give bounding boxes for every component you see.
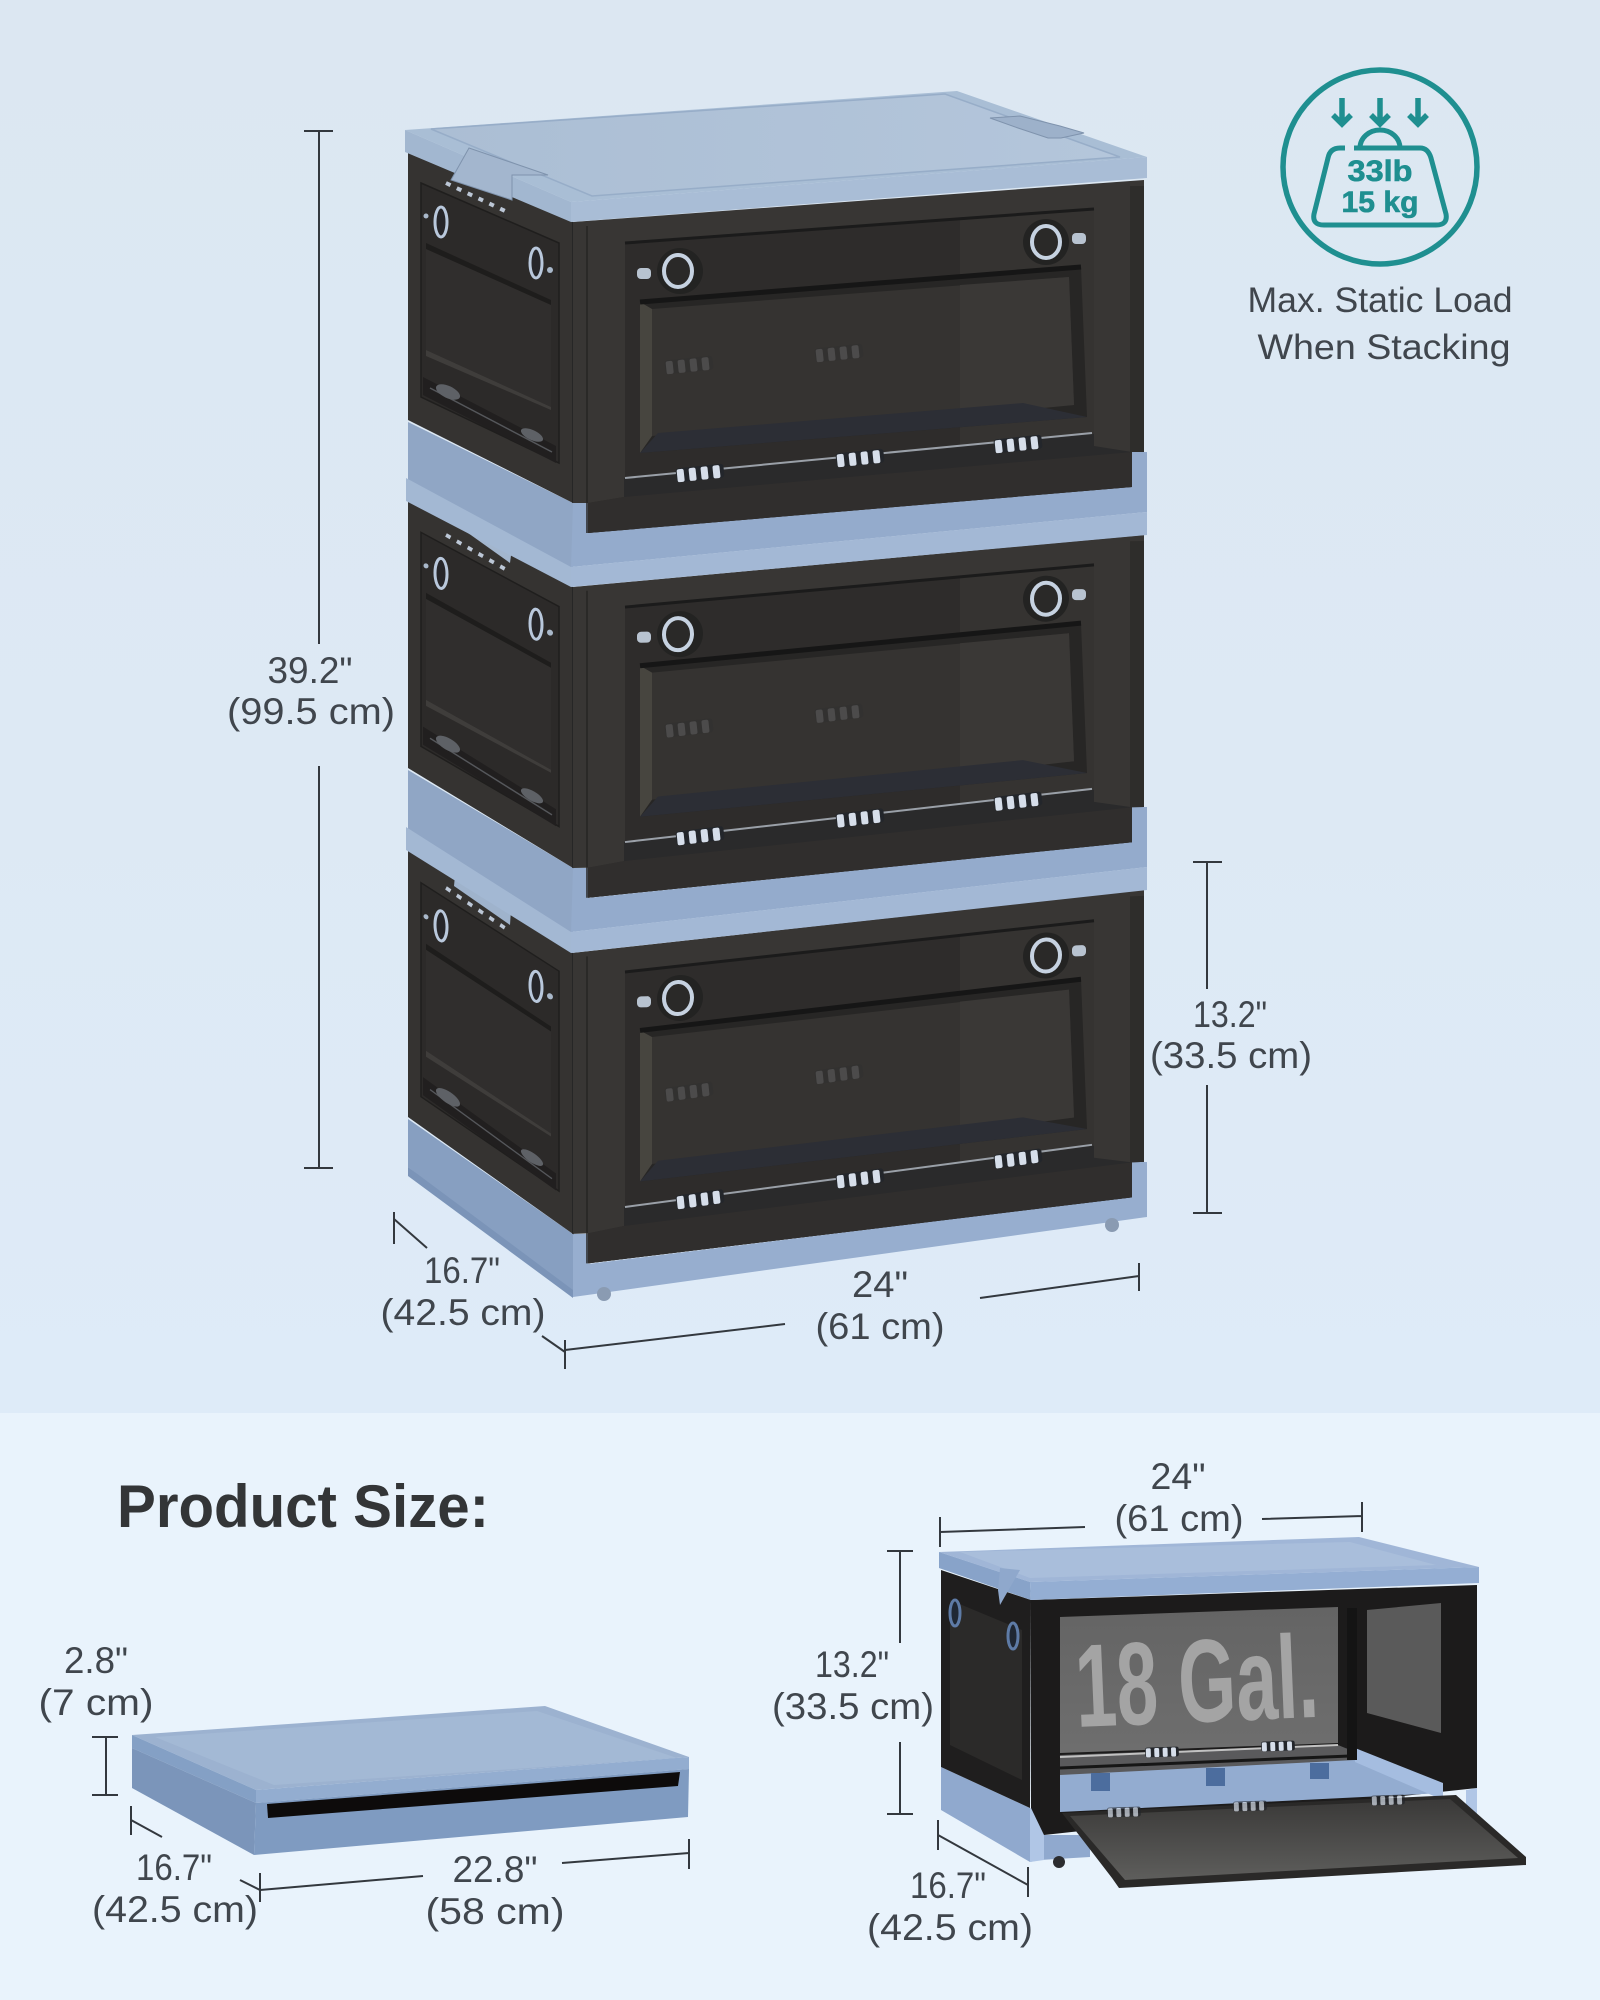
- background: lower section: [0, 1413, 1600, 2000]
- dimension: folded width 22.8 in: 22.8": [452, 1849, 538, 1890]
- folded box: [132, 1706, 689, 1855]
- dimension: depth 16.7 in: [380, 1212, 565, 1369]
- dimension: folded width 22.8 in: (58 cm): [426, 1891, 564, 1932]
- open front door: [1062, 1795, 1526, 1888]
- icon: max static load weight badge: 15 kg: [1342, 186, 1418, 219]
- stacked storage boxes: [405, 91, 1147, 1301]
- dimension: box height 13.2 in: (33.5 cm): [1150, 1035, 1312, 1076]
- dimension: open box depth 16.7 in: [867, 1820, 1033, 1948]
- dimension: folded height 2.8 in: [38, 1640, 154, 1795]
- dimension: folded height 2.8 in: (7 cm): [38, 1682, 154, 1723]
- dimension: folded depth 16.7 in: (42.5 cm): [92, 1889, 258, 1930]
- dimension: open box depth 16.7 in: 16.7": [910, 1865, 986, 1906]
- top box lid: [405, 91, 1147, 222]
- dimension: open box depth 16.7 in: (42.5 cm): [867, 1907, 1033, 1948]
- dimension: folded height 2.8 in: 2.8": [64, 1640, 128, 1681]
- dimension: folded width 22.8 in: [260, 1839, 689, 1932]
- dimension: width 24 in: 24": [852, 1264, 908, 1305]
- dimension: open box height 13.2 in: 13.2": [815, 1644, 889, 1685]
- icon: max static load weight badge: [1283, 70, 1477, 264]
- middle box: [406, 501, 1147, 953]
- dimension: width 24 in: (61 cm): [816, 1306, 944, 1347]
- dimension: folded depth 16.7 in: [92, 1806, 260, 1930]
- bottom box: [408, 850, 1147, 1301]
- dimension: total height 39.2 in: [227, 131, 395, 1168]
- caption: max static load when stacking: Max. Static Load: [1248, 281, 1512, 320]
- dimension: box height 13.2 in: 13.2": [1193, 994, 1267, 1035]
- icon: max static load weight badge: 33lb: [1348, 155, 1412, 188]
- dimension: folded depth 16.7 in: 16.7": [136, 1847, 212, 1888]
- background: upper section: [0, 0, 1600, 1413]
- dimension: open box width 24 in: [940, 1456, 1362, 1547]
- caption: max static load when stacking: When Stacking: [1258, 328, 1510, 367]
- heading: product size: Product Size:: [117, 1473, 489, 1540]
- dimension: open box width 24 in: 24": [1150, 1456, 1206, 1497]
- top box: [406, 153, 1147, 587]
- caption: max static load when stacking: [1248, 281, 1512, 367]
- dimension: total height 39.2 in: (99.5 cm): [227, 691, 395, 732]
- dimension: open box height 13.2 in: [772, 1551, 934, 1814]
- dimension: depth 16.7 in: 16.7": [424, 1250, 500, 1291]
- dimension: total height 39.2 in: 39.2": [268, 650, 352, 691]
- dimension: width 24 in: [565, 1263, 1139, 1350]
- dimension: open box width 24 in: (61 cm): [1114, 1498, 1244, 1539]
- dimension: depth 16.7 in: (42.5 cm): [380, 1292, 546, 1333]
- dimension: box height 13.2 in: [1150, 862, 1312, 1213]
- text: 18 Gal. on back panel: 18 Gal.: [1073, 1611, 1321, 1753]
- dimension: open box height 13.2 in: (33.5 cm): [772, 1686, 934, 1727]
- open box with 18 gallon capacity: [939, 1537, 1526, 1888]
